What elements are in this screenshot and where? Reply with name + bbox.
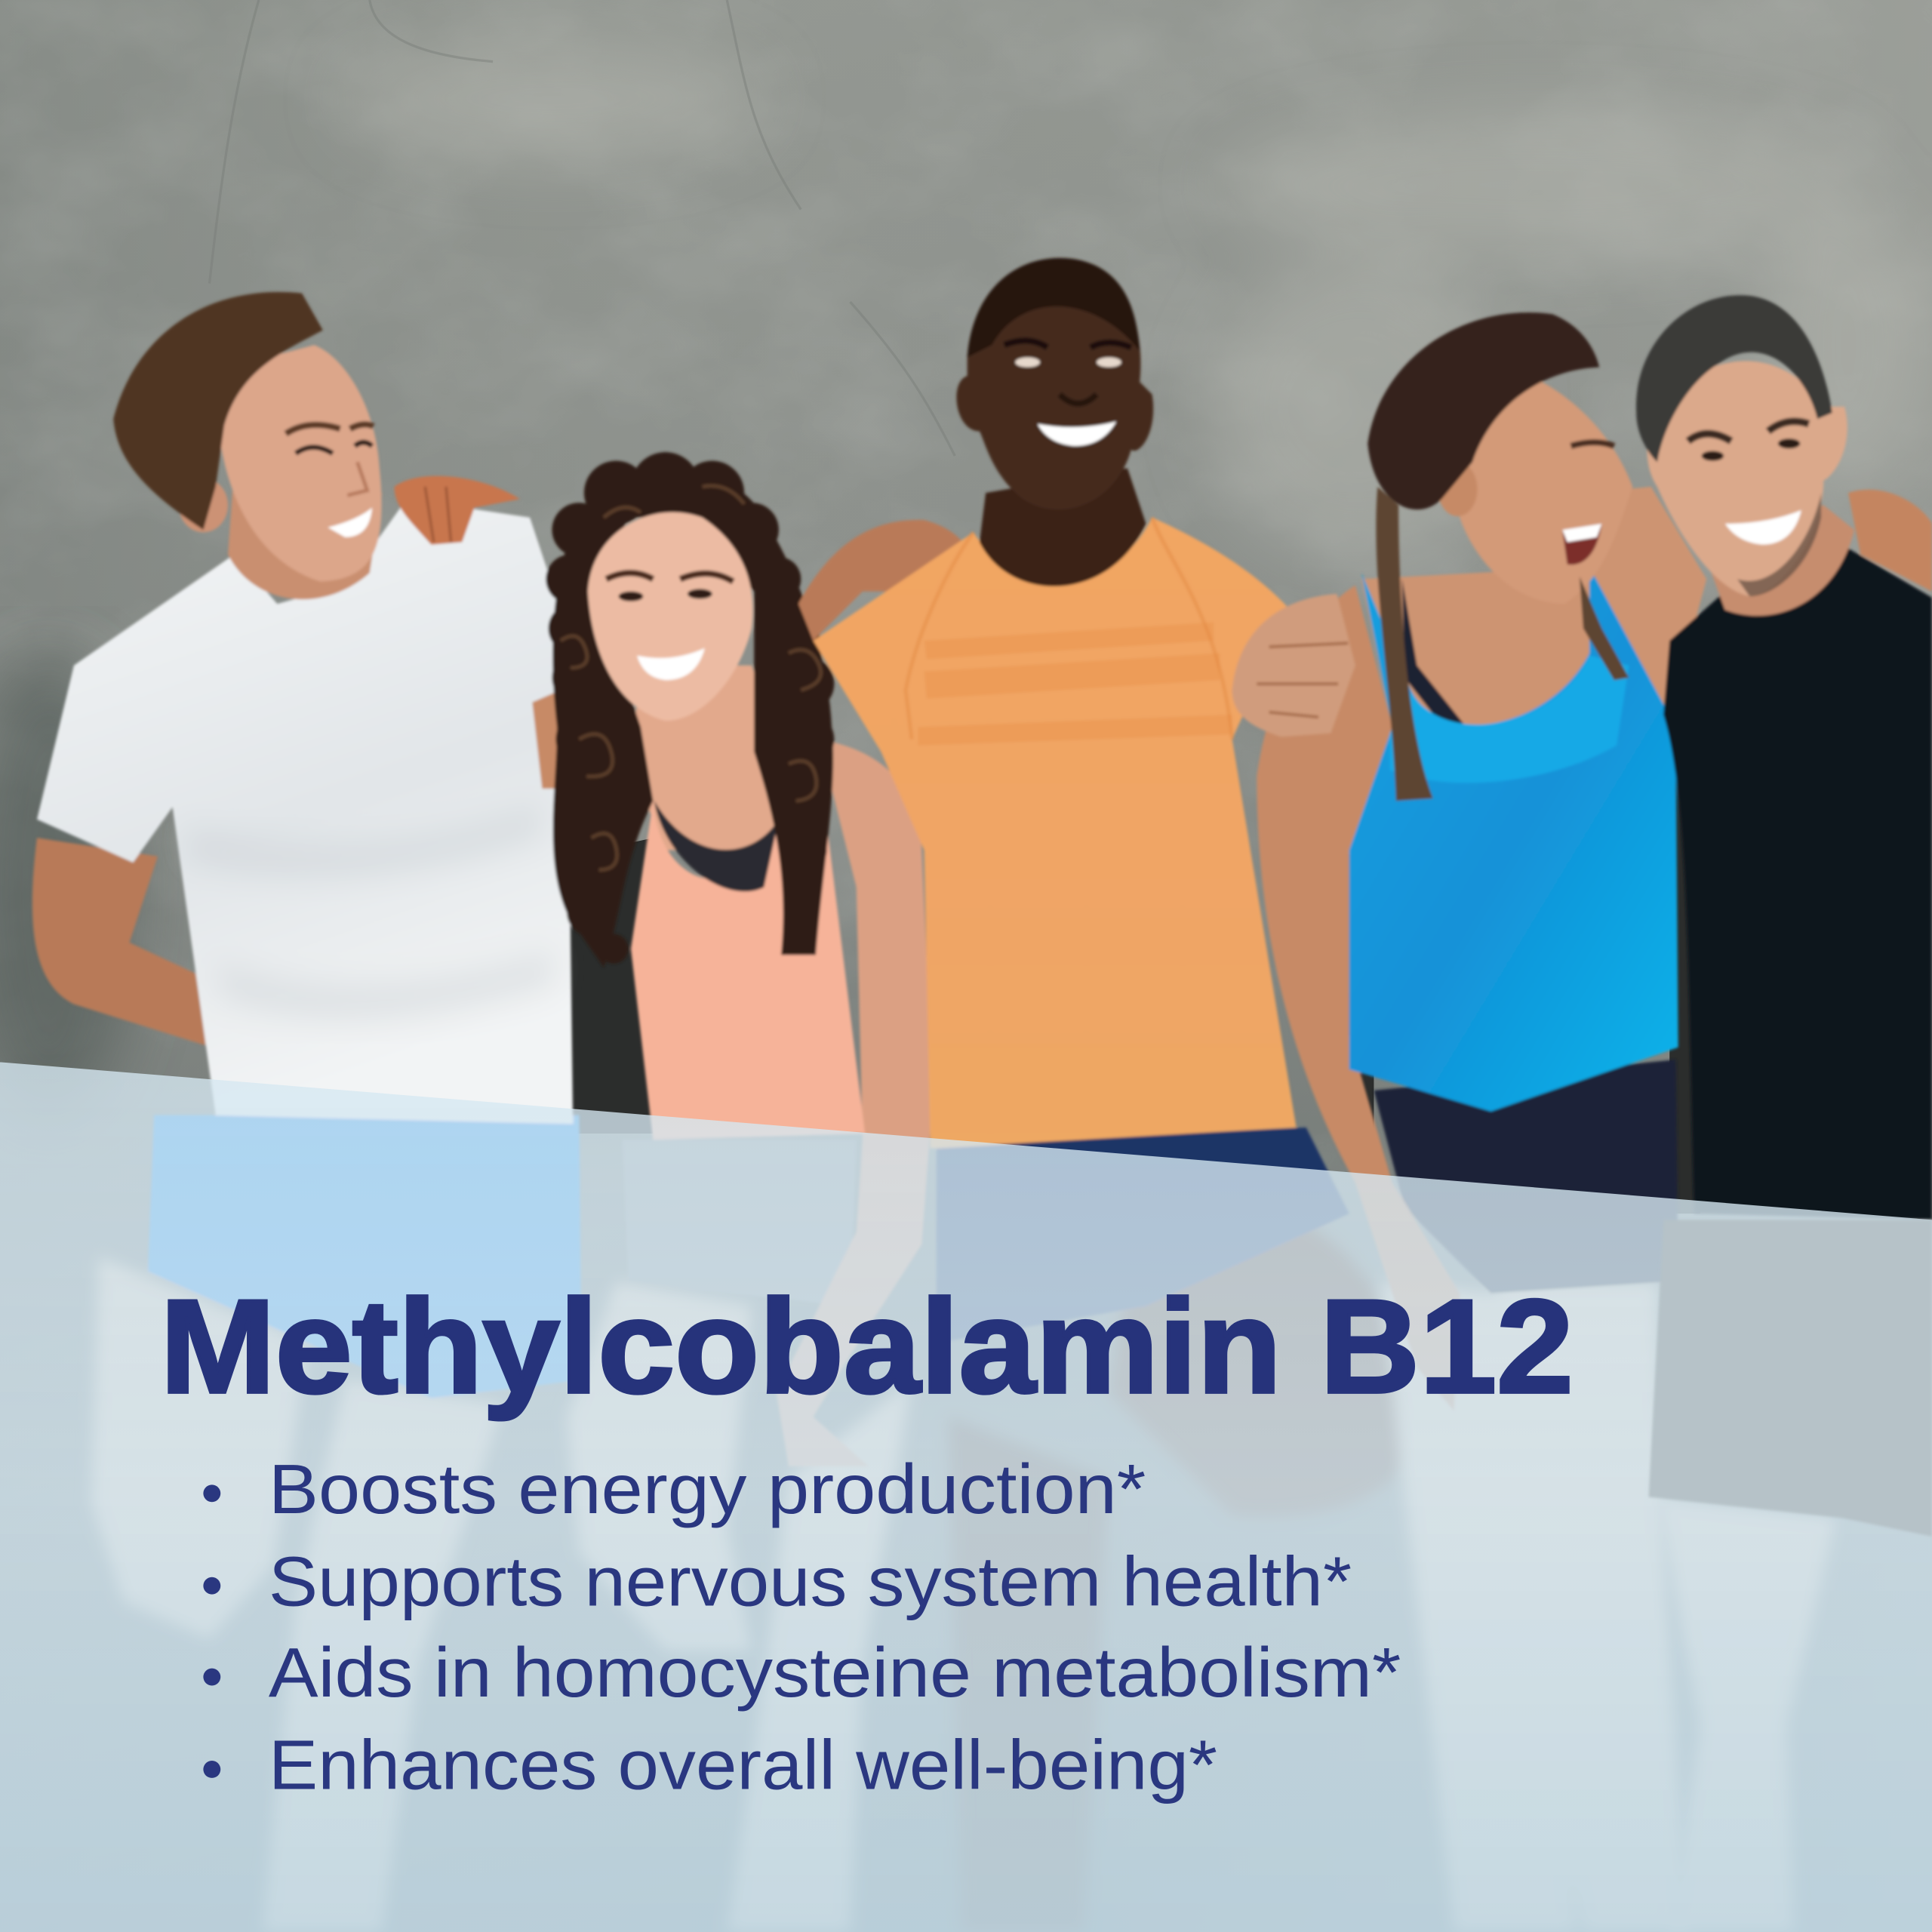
benefits bullet list <box>203 1450 1401 1804</box>
background: concrete wall <box>0 0 1932 1176</box>
translucent diagonal text panel <box>0 1062 1932 1932</box>
person: man in white t-shirt <box>32 292 582 1932</box>
bullet: homocysteine: Aids in homocysteine metabolism* <box>269 1633 1401 1712</box>
shadow behind the group <box>542 715 1700 1214</box>
title: Methylcobalamin B12 <box>160 1272 1574 1421</box>
person: woman in peach tank top <box>532 452 933 1932</box>
grey shorts seen through the panel <box>1648 1220 1932 1537</box>
person: man in orange t-shirt <box>798 258 1417 1932</box>
bullet: energy: Boosts energy production* <box>269 1450 1146 1528</box>
person: woman in blue tank top <box>1232 312 1706 1932</box>
bullet: well-being: Enhances overall well-being* <box>269 1726 1217 1804</box>
bullet: nervous system: Supports nervous system health* <box>269 1542 1352 1620</box>
curly hair <box>546 452 834 968</box>
person: man in black t-shirt <box>1636 295 1932 1932</box>
